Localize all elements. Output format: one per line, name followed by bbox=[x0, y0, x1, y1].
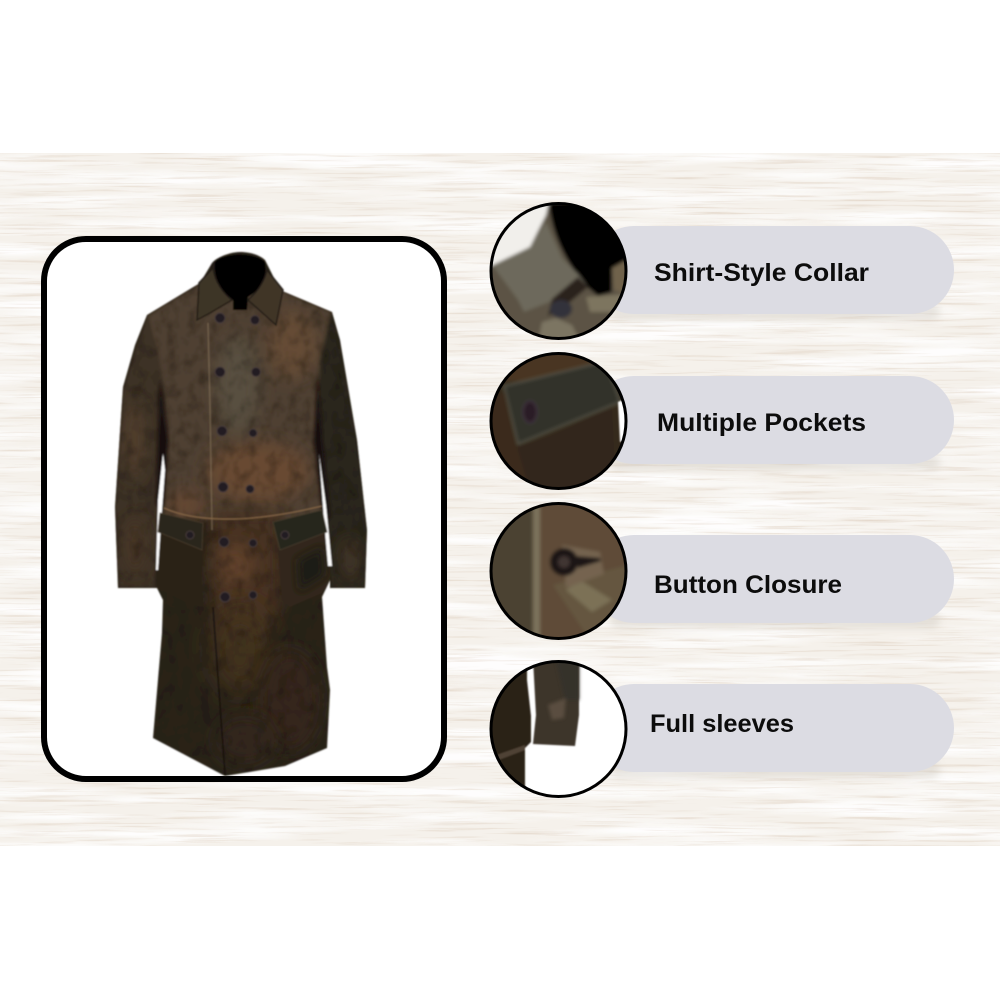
pill shadow bbox=[610, 762, 940, 778]
icon: button close-up bbox=[488, 501, 630, 641]
pill bbox=[590, 535, 954, 623]
skirt brown glow bbox=[212, 605, 268, 695]
feature row: Button Closure bbox=[488, 501, 954, 641]
pill bbox=[590, 376, 954, 464]
white arm gaps bbox=[156, 453, 165, 570]
collar right bbox=[248, 270, 283, 325]
waist seam bbox=[164, 506, 322, 519]
right pocket body bbox=[280, 534, 329, 605]
neck opening bbox=[215, 254, 266, 310]
left pocket body bbox=[162, 537, 163, 538]
background: whitewashed wood band bbox=[0, 153, 1000, 846]
label: Shirt-Style Collar bbox=[654, 259, 869, 287]
pill shadow bbox=[610, 454, 940, 470]
feature row: Multiple Pockets bbox=[488, 351, 954, 491]
illustration: brown leather double-breasted coat bbox=[100, 250, 380, 780]
label: Multiple Pockets bbox=[657, 409, 866, 437]
sleeves bbox=[115, 315, 168, 588]
pill bbox=[590, 684, 954, 772]
placket seam bbox=[208, 323, 212, 530]
icon: pocket flap close-up bbox=[488, 351, 630, 491]
feature row: Shirt-Style Collar bbox=[488, 201, 954, 341]
left pocket flap bbox=[158, 513, 203, 550]
pill shadow bbox=[610, 612, 940, 628]
right pocket flap bbox=[273, 510, 327, 550]
buttons bbox=[186, 313, 289, 602]
icon: collar close-up bbox=[488, 201, 630, 341]
panel: coat photo bbox=[44, 239, 444, 780]
leather grain bbox=[116, 252, 366, 776]
centre panel between pockets bbox=[208, 512, 282, 645]
label: Full sleeves bbox=[650, 710, 794, 738]
collar left bbox=[197, 268, 232, 320]
pill bbox=[590, 226, 954, 314]
feature row: Full sleeves bbox=[488, 659, 954, 799]
label: Button Closure bbox=[654, 571, 842, 599]
icon: sleeve cuff close-up bbox=[488, 659, 630, 799]
upper body bbox=[147, 283, 332, 520]
pill shadow bbox=[610, 304, 940, 320]
